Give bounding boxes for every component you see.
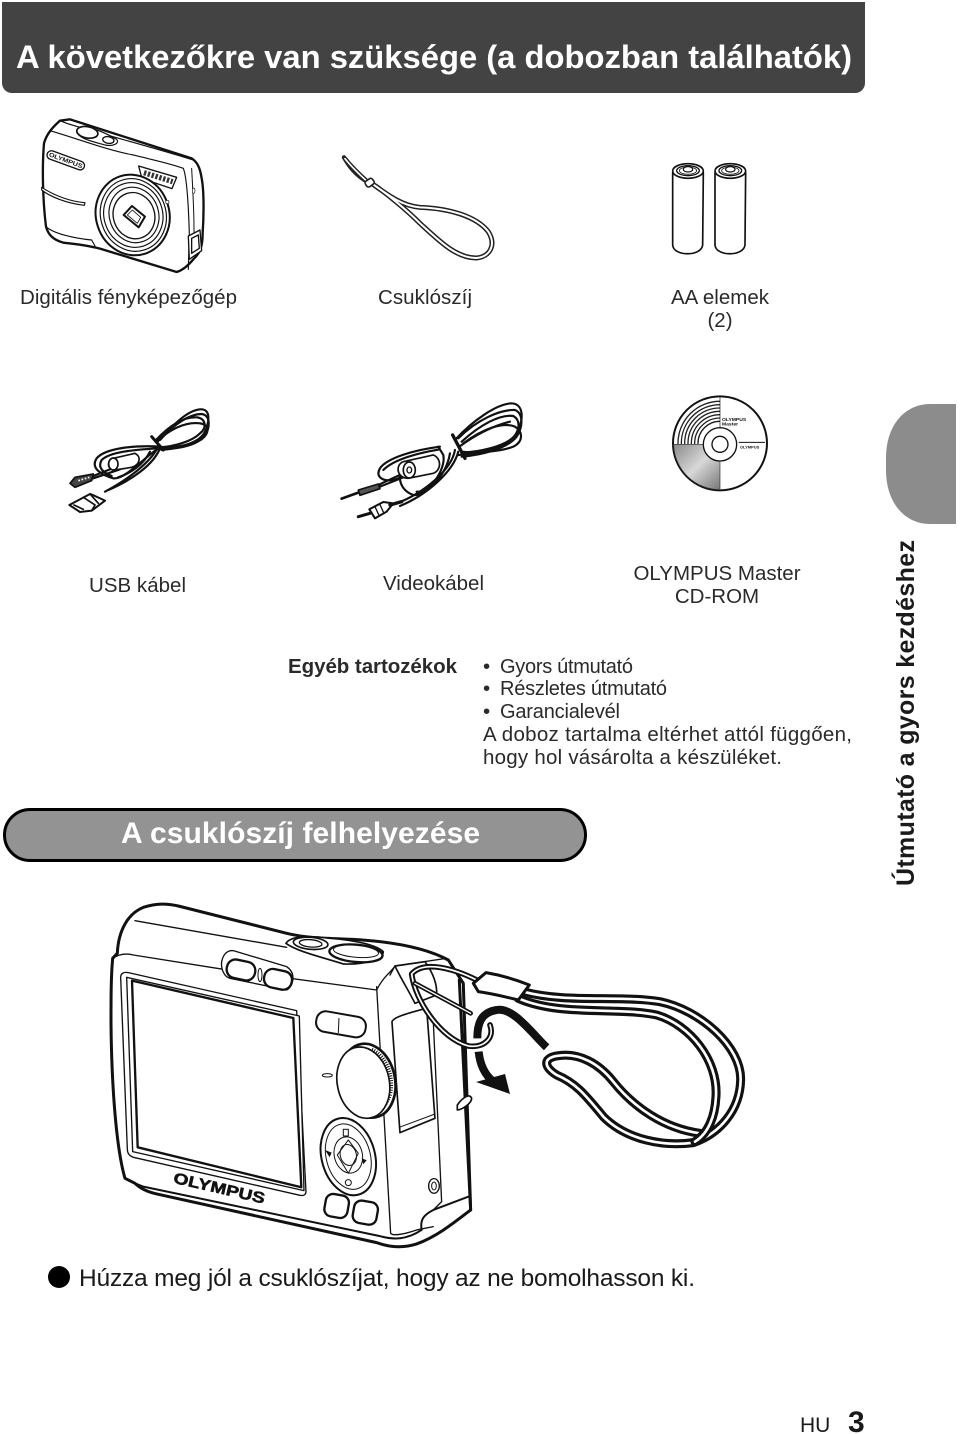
- buttons row: [315, 1010, 367, 1039]
- grip panel: [392, 1008, 435, 1133]
- label: batteries: (2): [707, 309, 733, 332]
- icon: CD-ROM: [673, 396, 767, 490]
- icon: bullet dot: [48, 1266, 70, 1288]
- label: camera: Digitális fényképezőgép: [20, 286, 237, 309]
- bottom buttons: [323, 1193, 379, 1226]
- flash window: [139, 166, 177, 189]
- heading: other accessories: Egyéb tartozékok: [288, 655, 458, 678]
- label: batteries: AA elemek: [671, 286, 770, 309]
- label: strap: Csuklószíj: [378, 286, 472, 309]
- direction arrow: [476, 1010, 547, 1094]
- label: USB: USB kábel: [89, 574, 186, 597]
- icon: CD-ROM: OLYMPUS: [722, 417, 747, 423]
- logo on camera: OLYMPUS: [48, 152, 83, 170]
- rear screen: [121, 972, 306, 1195]
- text block: accessories list: Garancialevél: [500, 701, 620, 723]
- illustration: strap threading: [412, 967, 741, 1144]
- logo on camera: [46, 150, 86, 171]
- icon: AA batteries: [673, 164, 746, 254]
- text block: accessories list: •: [483, 677, 490, 700]
- icon: CD-ROM: OLYMPUS: [740, 444, 760, 449]
- text block: accessories list: hogy hol vásárolta a készüléket.: [483, 746, 782, 769]
- strap thin loop: [412, 967, 491, 1046]
- label: video: Videokábel: [383, 572, 484, 595]
- icon: USB cable: [69, 409, 209, 512]
- instruction text: Húzza meg jól a csuklószíjat, hogy az ne bomolhasson ki.: [79, 1265, 695, 1292]
- text block: accessories list: Részletes útmutató: [500, 678, 667, 700]
- strap lug: [395, 962, 437, 1003]
- icon: video cable: [342, 403, 522, 518]
- zoom buttons: [222, 951, 294, 991]
- camera body: [111, 904, 471, 1247]
- text block: accessories list: A doboz tartalma eltérhet attól függően,: [483, 723, 852, 746]
- title bar: A következőkre van szüksége (a dobozban találhatók): [16, 39, 852, 75]
- logo on rear: OLYMPUS: [172, 1170, 267, 1208]
- vertical side title: Útmutató a gyors kezdéshez: [890, 540, 920, 886]
- icon: CD-ROM: Master: [722, 422, 738, 428]
- label: CD-ROM: CD-ROM: [675, 585, 759, 608]
- icon: digital camera front: [42, 119, 204, 272]
- text block: accessories list: •: [483, 655, 490, 678]
- section pill heading: A csuklószíj felhelyezése: [121, 817, 480, 850]
- text block: accessories list: Gyors útmutató: [500, 656, 633, 678]
- icon: wrist strap: [344, 157, 492, 258]
- text block: accessories list: •: [483, 700, 490, 723]
- strap loop large: [518, 992, 741, 1144]
- navigation pad: [312, 1112, 384, 1202]
- label: CD-ROM: OLYMPUS Master: [633, 562, 801, 585]
- title bar: [2, 2, 865, 93]
- mode dial: [322, 1039, 402, 1123]
- text block: accessories list: [483, 655, 852, 769]
- section pill heading: [4, 810, 586, 860]
- side tab: [886, 404, 956, 524]
- connector door: [188, 230, 202, 259]
- top shutter and power controls: [286, 936, 383, 964]
- illustration: camera rear: [111, 904, 472, 1247]
- lens rings: [85, 165, 180, 265]
- strap clip: [473, 973, 529, 1000]
- icon: top dial: [76, 125, 118, 145]
